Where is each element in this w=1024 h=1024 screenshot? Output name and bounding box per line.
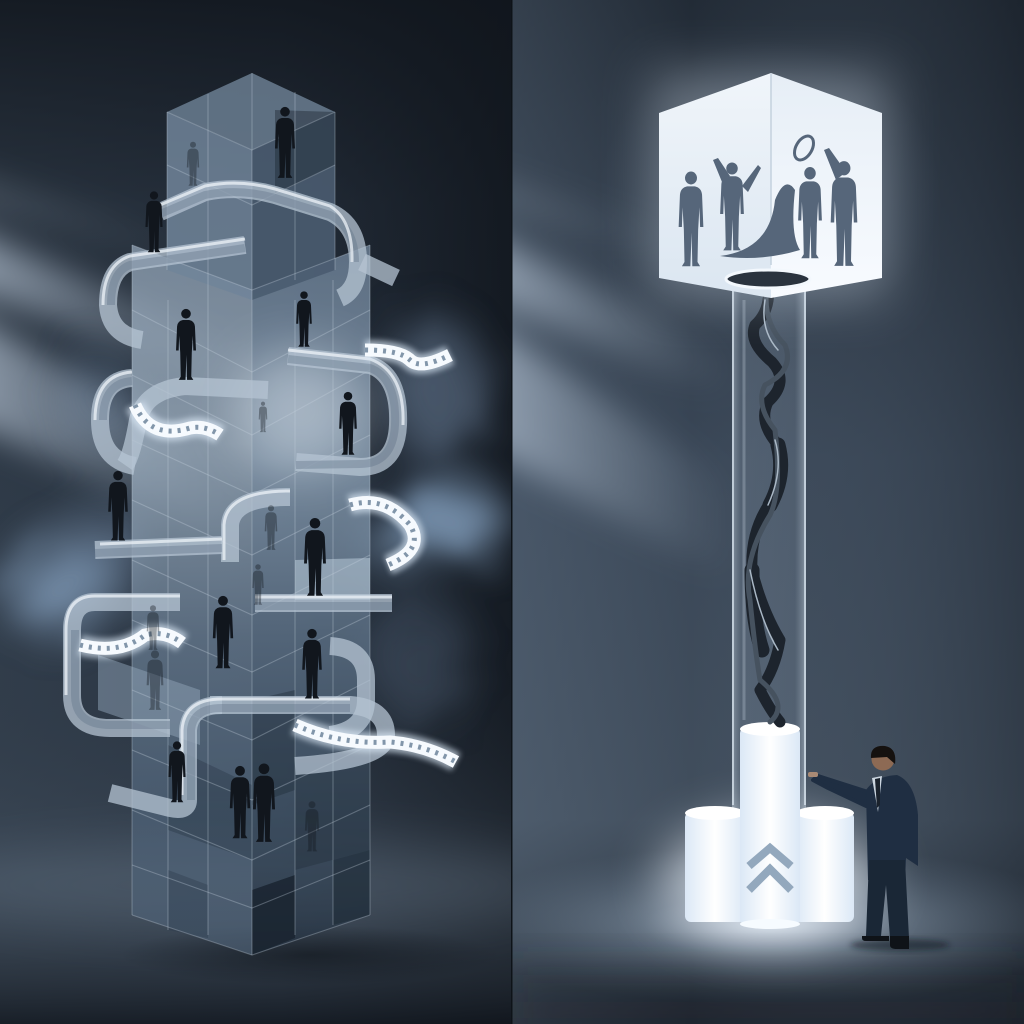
right panel background (512, 0, 1024, 1024)
figure (108, 471, 128, 541)
figure (253, 763, 275, 842)
figure (296, 291, 312, 347)
icon: upward chevrons (749, 848, 791, 890)
figure (275, 107, 295, 178)
silhouette figures on tower (108, 107, 357, 851)
tower glow patch (235, 350, 365, 470)
glowing podium (660, 722, 880, 940)
glass tower (98, 73, 370, 955)
figure (213, 596, 233, 668)
glowing data ribbons (80, 350, 456, 762)
figure (679, 172, 703, 266)
figure (720, 163, 744, 250)
figure (302, 629, 322, 699)
fog clouds (5, 320, 505, 725)
left panel background (0, 0, 511, 1024)
twisting dark ribbon (748, 280, 788, 722)
figure (230, 766, 250, 838)
figure (304, 518, 326, 596)
panel: left tangled tower scene (0, 0, 511, 1024)
figures inside cube (679, 133, 857, 266)
figure (176, 309, 196, 380)
glass tube (732, 285, 806, 815)
figure (798, 167, 822, 258)
faded figures (147, 142, 319, 851)
dark cube patches (252, 875, 295, 955)
pipes (66, 183, 403, 809)
glowing cube (650, 70, 890, 300)
figure (145, 191, 163, 252)
figure (339, 392, 357, 455)
figure (831, 161, 857, 266)
panel divider (511, 0, 512, 1024)
figure (168, 741, 186, 802)
tower shadow (175, 932, 426, 974)
panel: right streamlined pipeline scene (512, 0, 1024, 1024)
man in suit pointing (808, 746, 950, 951)
